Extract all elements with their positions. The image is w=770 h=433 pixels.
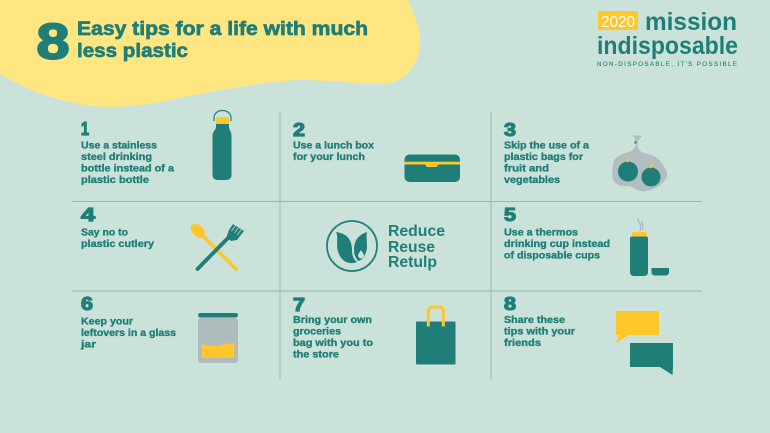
- tip 7: text: [293, 295, 373, 360]
- tip 1: text: steel drinking: [81, 152, 152, 163]
- tip 7: text: groceries: [293, 326, 341, 338]
- logo: mission indisposable: NON-DISPOSABLE, IT'S POSSIBLE: [597, 61, 737, 68]
- tip 3: text: plastic bags for: [504, 152, 583, 163]
- tip 2: text: for your lunch: [293, 152, 365, 163]
- title: less plastic: [77, 40, 188, 62]
- tip 1: text: plastic bottle: [81, 175, 149, 186]
- tip 8: text: Share these: [504, 315, 565, 326]
- tip 8: text: [504, 294, 575, 349]
- logo: mission indisposable: 2020: [601, 14, 635, 31]
- title: 8: [36, 14, 70, 70]
- tip 4: text: 4: [81, 205, 95, 225]
- tip 5: text: [504, 205, 610, 262]
- tip 1: text: bottle instead of a: [81, 164, 174, 174]
- tip 4: text: Say no to: [81, 228, 128, 238]
- tip 5: text: Use a thermos: [504, 228, 578, 238]
- tip 3: text: [504, 120, 589, 186]
- center logo: reduce reuse retulp: [327, 221, 445, 271]
- tip 7: text: the store: [293, 350, 339, 360]
- tip 3: text: vegetables: [504, 175, 560, 186]
- tip 5: text: of disposable cups: [504, 250, 600, 262]
- tip 7: text: Bring your own: [293, 315, 372, 326]
- title: Easy tips for a life with much: [77, 18, 368, 40]
- tip 2: text: [293, 120, 374, 163]
- tip 6: text: Keep your: [81, 316, 133, 328]
- icon: chat bubbles: [616, 311, 673, 375]
- title: [36, 14, 368, 70]
- tip 5: text: drinking cup instead: [504, 239, 610, 250]
- center logo: reduce reuse retulp: Reuse: [388, 239, 435, 256]
- icon: steel bottle: [212, 110, 232, 180]
- tip 8: text: 8: [504, 294, 516, 314]
- tip 4: text: [81, 205, 154, 250]
- icon: grocery bag: [416, 307, 456, 364]
- tip 6: text: 6: [81, 294, 93, 314]
- tip 6: text: [80, 294, 176, 350]
- tip 5: text: 5: [504, 205, 516, 225]
- icon: thermos and cup: [630, 218, 669, 276]
- tip 8: text: friends: [504, 338, 541, 349]
- icon: glass jar: [198, 313, 238, 363]
- center logo: reduce reuse retulp: Reduce: [388, 223, 445, 240]
- tip 3: text: Skip the use of a: [504, 140, 589, 152]
- tip 6: text: leftovers in a glass: [81, 328, 176, 339]
- tip 1: text: 1: [81, 119, 89, 139]
- tip 8: text: tips with your: [504, 326, 575, 338]
- tip 2: text: 2: [293, 120, 305, 140]
- tip 2: text: Use a lunch box: [293, 140, 374, 152]
- yellow header blob: [0, 0, 420, 107]
- tip 1: text: Use a stainless: [81, 140, 157, 152]
- tip 4: text: plastic cutlery: [81, 239, 154, 250]
- grid lines: [72, 112, 702, 380]
- tip 6: text: jar: [80, 340, 96, 350]
- tip 3: text: 3: [504, 120, 516, 140]
- tip 7: text: bag with you to: [293, 338, 373, 349]
- tip 7: text: 7: [293, 295, 305, 315]
- center logo: reduce reuse retulp: Retulp: [388, 254, 437, 271]
- tip 1: text: [81, 119, 174, 186]
- icon: plastic bag with fruit: [612, 135, 667, 191]
- tip 3: text: fruit and: [504, 164, 549, 174]
- logo: mission indisposable: mission: [645, 8, 737, 36]
- logo: mission indisposable: [597, 8, 738, 68]
- icon: lunch box: [404, 154, 460, 182]
- logo: mission indisposable: indisposable: [597, 32, 738, 60]
- icon: crossed spoon and fork: [188, 221, 244, 269]
